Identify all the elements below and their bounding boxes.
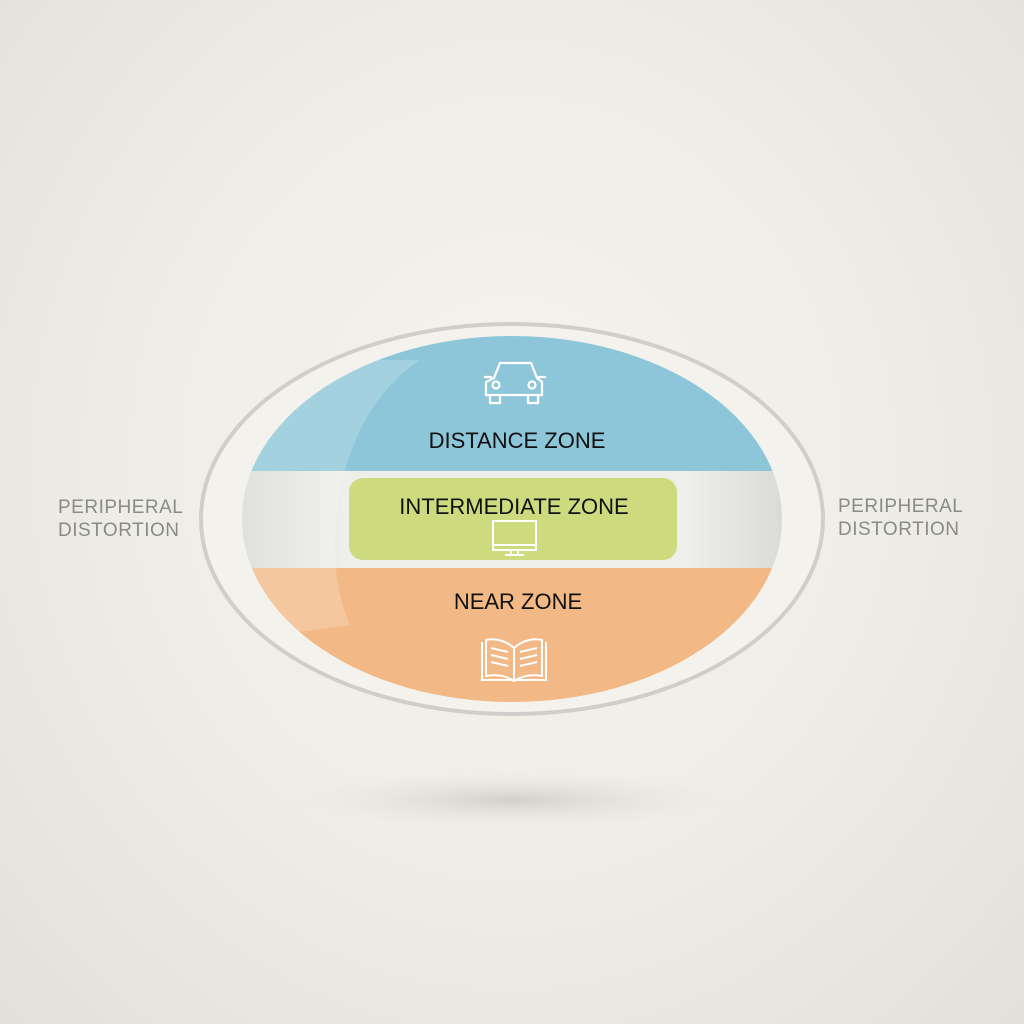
zone: distance	[252, 336, 772, 471]
shadow	[282, 770, 742, 830]
intermediate zone box	[349, 478, 677, 560]
label: right peripheral distortion: DISTORTION	[838, 519, 959, 540]
label: left peripheral distortion	[58, 497, 183, 541]
outer lens rim	[201, 324, 823, 714]
lens zones	[230, 330, 800, 708]
zone: near	[252, 568, 772, 702]
label: right peripheral distortion: PERIPHERAL	[838, 496, 963, 517]
icon: book	[482, 639, 546, 681]
zone: gray band	[230, 471, 800, 568]
label: left peripheral distortion: PERIPHERAL	[58, 497, 183, 518]
text: near zone: NEAR ZONE	[454, 589, 582, 614]
icon: monitor	[493, 521, 536, 555]
text: distance zone: DISTANCE ZONE	[429, 428, 605, 453]
label: left peripheral distortion: DISTORTION	[58, 520, 179, 541]
label: right peripheral distortion	[838, 496, 963, 540]
lens diagram	[199, 322, 825, 816]
text: intermediate zone: INTERMEDIATE ZONE	[399, 494, 629, 519]
icon: car	[484, 363, 546, 403]
